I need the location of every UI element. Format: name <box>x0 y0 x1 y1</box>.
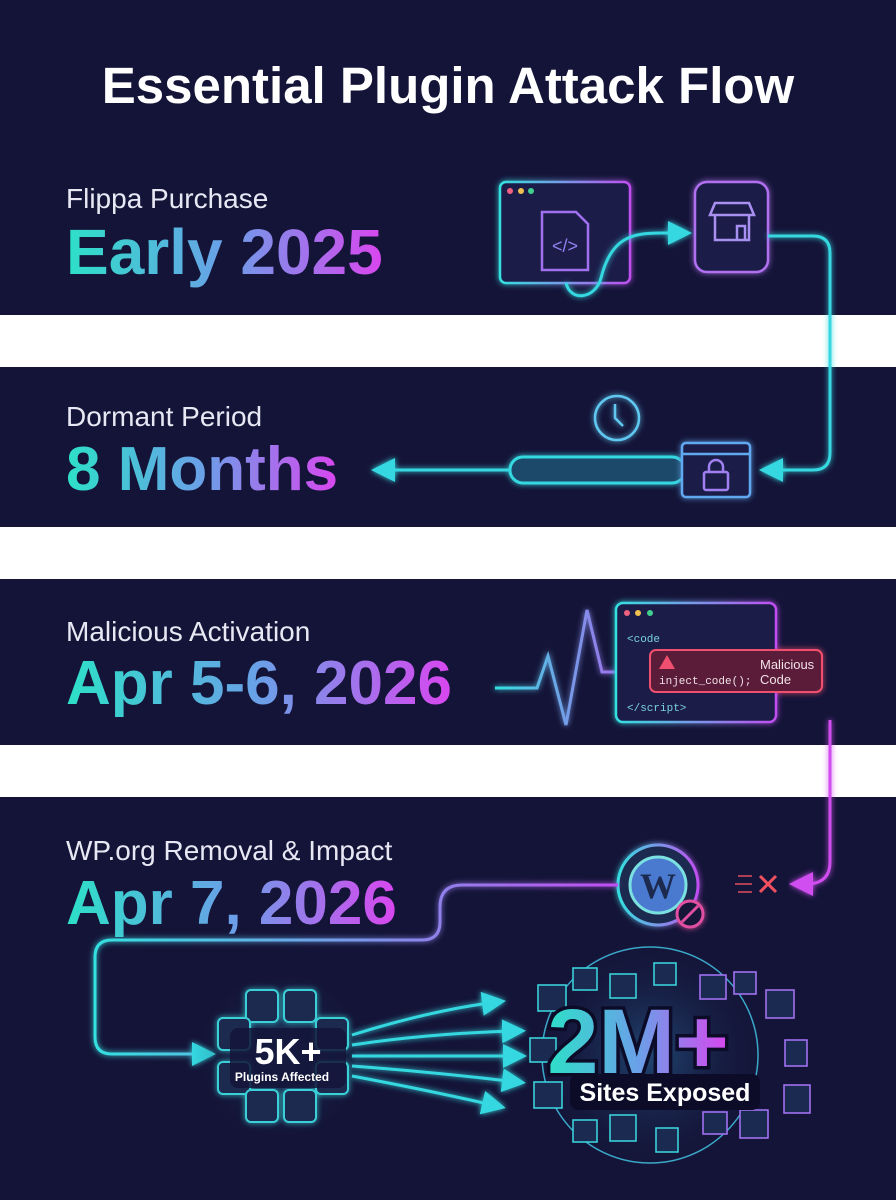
progress bar with arrow <box>380 457 685 483</box>
stage 3 text: Malicious Activation <box>66 616 310 647</box>
stage 1 text <box>66 183 383 288</box>
code window with malicious callout <box>616 603 822 722</box>
arrow: browser to store, store to lock <box>566 233 830 470</box>
icon: wordpress blocked <box>618 845 703 927</box>
callout: malicious code: inject_code(); <box>659 676 751 688</box>
stage 1 text: Early 2025 <box>66 216 383 288</box>
code window with malicious callout: <code <box>627 634 660 646</box>
stage 4 text: WP.org Removal & Impact <box>66 835 392 866</box>
icon: browser with code file: </> <box>552 236 578 256</box>
icon: lock window <box>682 443 750 497</box>
plugins affected cluster <box>192 965 372 1145</box>
stage 2 text: 8 Months <box>66 435 338 504</box>
sites exposed network <box>525 930 810 1180</box>
stage 4 text <box>66 835 397 938</box>
sites exposed network: Sites Exposed <box>580 1079 750 1107</box>
plugins affected cluster: Plugins Affected <box>235 1070 329 1084</box>
stage 3 text <box>66 616 452 718</box>
icon: X and speed lines <box>735 876 776 892</box>
callout: malicious code: Malicious <box>760 657 815 672</box>
pulse line <box>495 610 652 725</box>
code window with malicious callout: </script> <box>627 703 686 715</box>
arrows: plugins to sites <box>352 1002 518 1106</box>
sites exposed network: 2M+ <box>547 991 729 1093</box>
icon: browser with code file <box>500 182 630 283</box>
arrow: code to removal <box>798 720 830 884</box>
icon: store <box>695 182 768 272</box>
icon: wordpress blocked: W <box>640 866 676 906</box>
white bands <box>0 315 896 797</box>
stage 2 text: Dormant Period <box>66 401 262 432</box>
stage 4 text: Apr 7, 2026 <box>66 869 397 938</box>
title: Essential Plugin Attack Flow <box>102 57 795 114</box>
stage 1 text: Flippa Purchase <box>66 183 268 214</box>
stage 2 text <box>66 401 338 504</box>
stage 3 text: Apr 5-6, 2026 <box>66 649 452 718</box>
callout: malicious code: Code <box>760 672 791 687</box>
connector: wp to plugins <box>95 885 618 1054</box>
icon: clock <box>595 396 639 440</box>
plugins affected cluster: 5K+ <box>254 1031 322 1072</box>
callout: malicious code <box>650 650 822 692</box>
